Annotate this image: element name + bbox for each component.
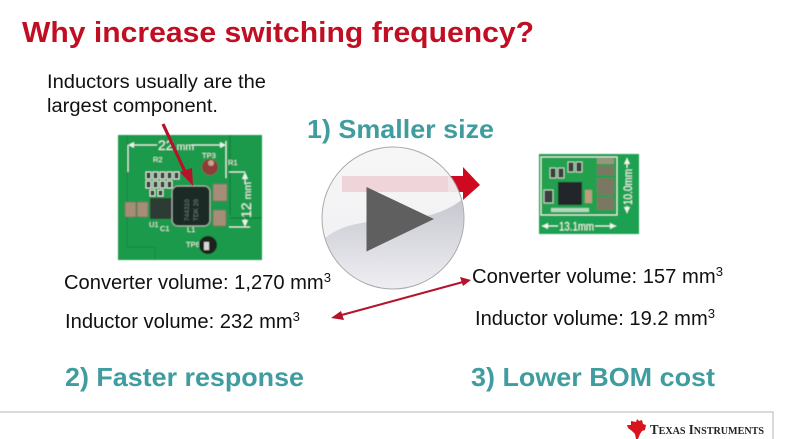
dimension: 10.0mm: 10.0mm: [621, 169, 635, 205]
silkscreen labels: TP6: [186, 240, 200, 249]
title: Why increase switching frequency?: [22, 17, 534, 49]
large converter board photo: [118, 135, 262, 260]
logo: Texas Instruments: [627, 419, 764, 439]
dimension: 13.1mm: 13.1mm: [559, 220, 594, 234]
footer frame: [0, 412, 773, 439]
text: small inductor volume: Inductor volume: 19.2 mm: [475, 308, 706, 330]
dimension: 22 mm: [128, 137, 226, 178]
silkscreen labels: TP3: [202, 151, 216, 160]
chip: [558, 182, 582, 205]
test point TP6: [199, 236, 217, 254]
heading: lower BOM cost: 3) Lower BOM cost: [471, 362, 715, 392]
silkscreen labels: U1: [149, 220, 159, 229]
capacitors: [125, 184, 227, 226]
callout: inductors: Inductors usually are the: [47, 72, 266, 93]
text: small inductor volume: 3: [708, 306, 715, 321]
double-headed arrow: [331, 277, 471, 320]
arrow: points to inductor: [163, 124, 193, 186]
arrow: size reduction: [342, 167, 480, 200]
silkscreen labels: L1: [187, 225, 195, 234]
silkscreen labels: [149, 151, 238, 249]
heading: smaller size: 1) Smaller size: [307, 114, 494, 144]
callout: inductors: largest component.: [47, 96, 218, 117]
dimension: 12 mm: 12mm: [238, 182, 254, 218]
power components: [597, 158, 614, 210]
text: large inductor volume: Inductor volume: 232 mm: [65, 311, 291, 333]
text: small converter volume: Converter volume: 157 mm: [472, 266, 713, 288]
heading: faster response: 2) Faster response: [65, 362, 304, 392]
small converter board photo: [539, 154, 639, 234]
text: large converter volume: Converter volume: 1,270 mm: [64, 272, 322, 294]
text: large inductor volume: 3: [293, 309, 300, 324]
silkscreen labels: C1: [160, 224, 170, 233]
text: large converter volume: 3: [324, 270, 331, 285]
large converter board photo: 744310: [184, 199, 191, 221]
dimension: 22 mm: 22 mm: [158, 137, 194, 153]
logo: Texas Instruments: TEXAS INSTRUMENTS: [650, 423, 764, 438]
small component cluster: [146, 172, 179, 196]
inductor: [172, 186, 210, 226]
test point TP3: [202, 159, 218, 175]
large converter board photo: TDK 26: [193, 199, 200, 221]
dimension: 12 mm: [229, 172, 254, 227]
silkscreen labels: R1: [228, 158, 238, 167]
small parts: [544, 162, 582, 203]
silkscreen labels: R2: [153, 155, 163, 164]
video play button overlay: [322, 147, 465, 292]
callout: inductors: [47, 72, 266, 117]
text: small converter volume: 3: [716, 264, 723, 279]
driver chip: [150, 198, 174, 219]
